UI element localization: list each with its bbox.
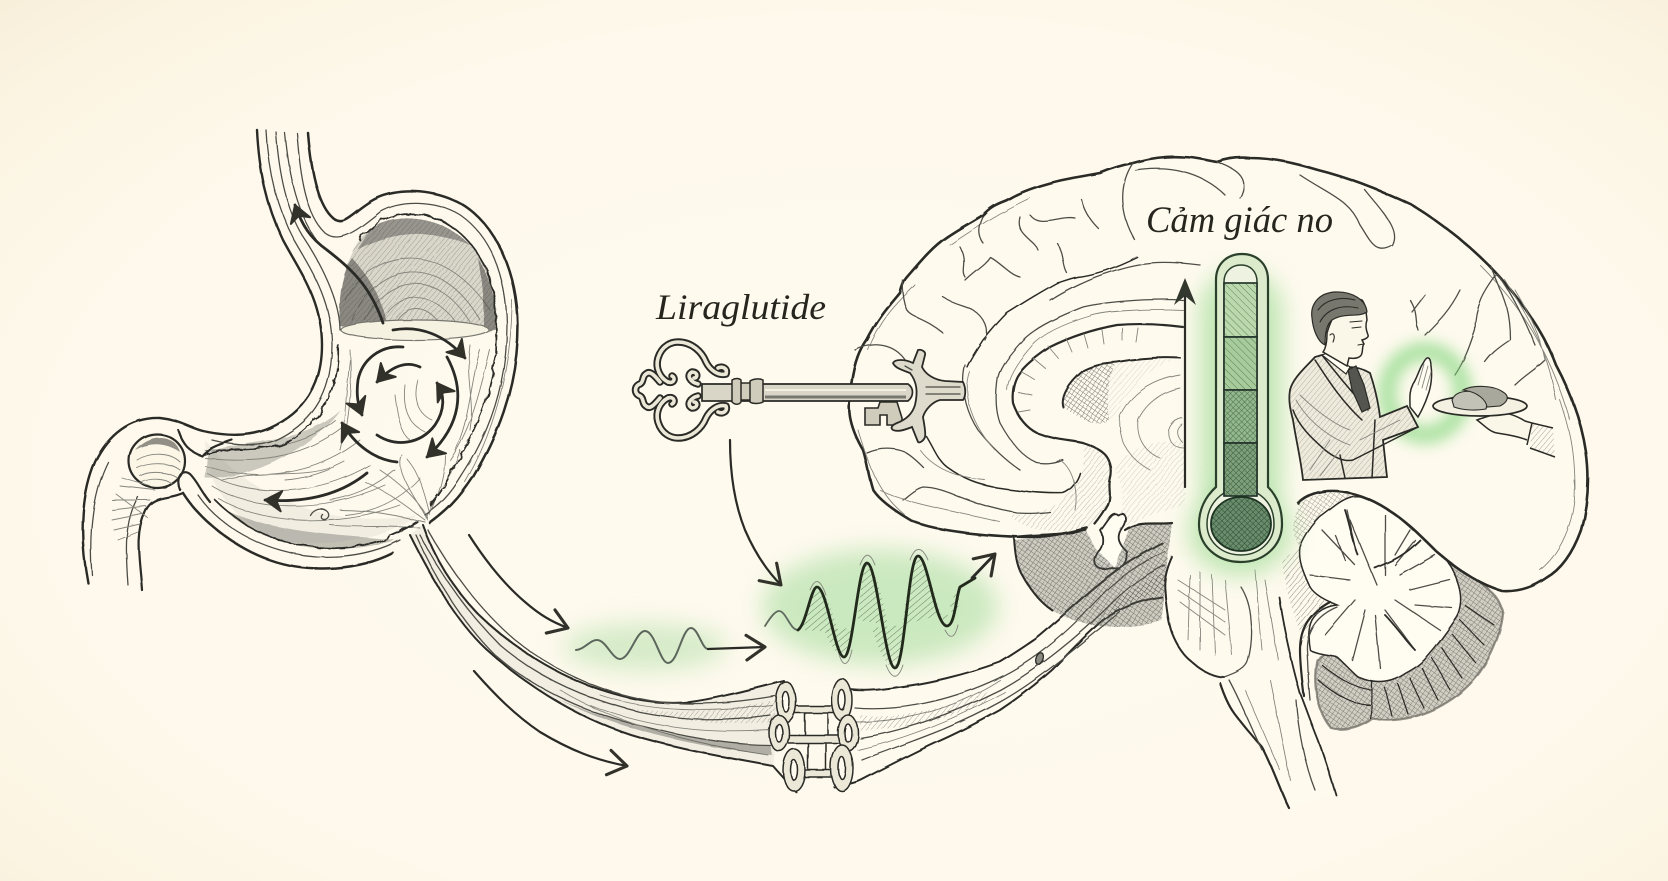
nerve right bundle <box>834 543 1165 787</box>
nerve left bundle <box>410 525 796 792</box>
key bow <box>636 342 726 438</box>
cerebellum hatched body <box>1282 491 1503 729</box>
glow: small wave <box>563 623 727 671</box>
pylorus <box>129 430 232 502</box>
icon: key <box>636 342 965 442</box>
arrow: along nerve <box>474 671 627 766</box>
amygdala and midbrain hatched <box>1014 523 1172 627</box>
icon: plate of food held out <box>1433 386 1555 457</box>
arrow: key to signal <box>730 440 781 585</box>
illustration: brain <box>849 157 1588 808</box>
arrows: stomach churning <box>265 205 465 501</box>
duodenum <box>91 462 183 590</box>
corpus callosum arcs <box>1050 262 1200 300</box>
thermometer bulb <box>1211 497 1271 551</box>
large wave signal <box>765 550 995 676</box>
brain stem <box>1165 557 1336 808</box>
server arm <box>1477 413 1555 457</box>
cerebrum contour <box>849 157 1588 591</box>
label: Liraglutide: Liraglutide <box>655 287 826 327</box>
glow: large wave <box>762 549 998 665</box>
thermometer casing <box>1199 254 1282 562</box>
flow arrows <box>469 440 781 766</box>
key collar <box>732 378 763 404</box>
man hand <box>1410 358 1432 417</box>
cerebellum outer ribs <box>1318 606 1494 718</box>
hypothalamic structures <box>1095 514 1127 569</box>
man hair <box>1312 292 1367 345</box>
stomach body shading <box>205 345 490 549</box>
nerve cut bundle knot <box>769 679 858 791</box>
arrow: fullness rises <box>1174 278 1196 487</box>
man head <box>1323 299 1368 366</box>
thermometer level segments <box>1224 283 1257 496</box>
key ward <box>892 350 965 442</box>
key shaft <box>702 384 912 401</box>
food <box>1452 391 1487 410</box>
small wave signal <box>576 628 765 663</box>
man jacket <box>1289 355 1418 480</box>
label: Cảm giác no: Cảm giác no <box>1146 200 1333 241</box>
thermometer <box>1199 254 1282 562</box>
man shirt and tie <box>1348 366 1370 412</box>
thalamus hatching <box>1062 358 1184 470</box>
stomach wall contours <box>83 130 518 583</box>
illustration: vagus nerve <box>410 525 1165 792</box>
stomach fundus shading <box>339 218 497 340</box>
plate <box>1433 396 1527 416</box>
glow: thermometer <box>1188 270 1292 576</box>
gyri lines <box>855 162 1575 531</box>
waves <box>576 550 995 676</box>
figure: man refusing food <box>1289 292 1432 480</box>
illustration: stomach <box>83 130 518 590</box>
arrow: stomach to signal <box>469 535 568 628</box>
key bit <box>865 402 902 425</box>
glow: refusal ring <box>1387 351 1463 435</box>
